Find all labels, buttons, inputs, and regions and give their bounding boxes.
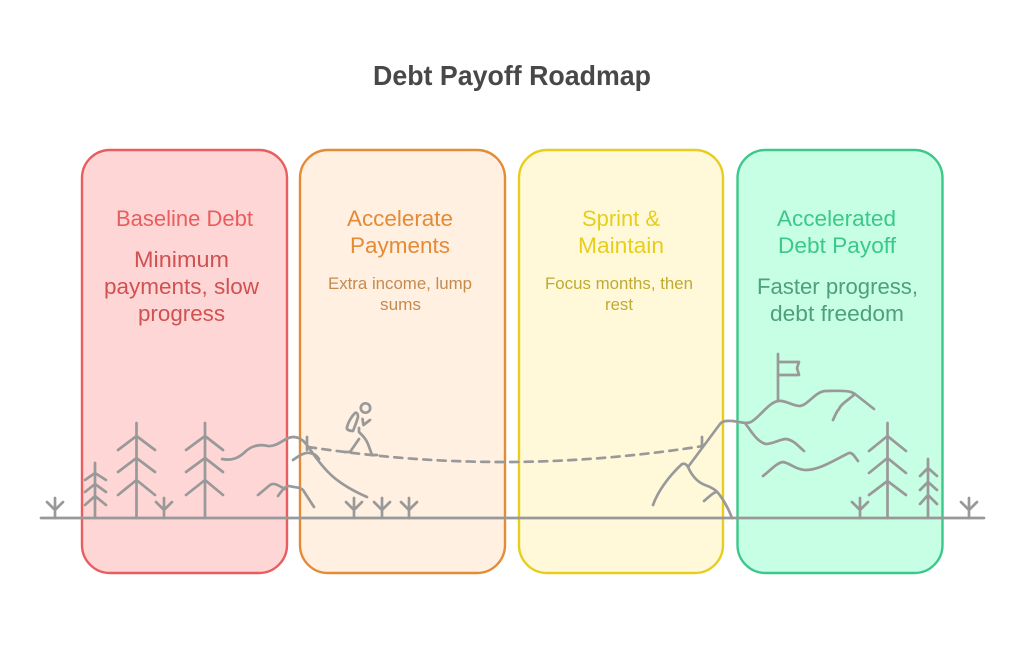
text: payoff description: Faster progress, — [757, 274, 918, 299]
panel: accelerated debt payoff — [738, 150, 942, 573]
text: payoff description: debt freedom — [770, 301, 904, 326]
text: accelerate description — [328, 275, 472, 314]
icon: sprout on peak — [701, 437, 703, 447]
text: baseline description: payments, slow — [104, 274, 260, 299]
icon: sprout on hill — [306, 437, 308, 450]
icon: large tree right — [869, 423, 906, 518]
icon: large tree one — [118, 423, 155, 518]
text: accelerate description: Extra income, lump — [328, 275, 472, 293]
icon: summit flag — [778, 354, 799, 401]
icon: mountain ridge lines — [688, 423, 858, 518]
icon: small tree left — [85, 463, 106, 518]
title: Debt Payoff Roadmap — [373, 60, 651, 91]
text: sprint description: rest — [605, 296, 633, 314]
icon: large tree two — [186, 423, 223, 518]
text: accelerate description: sums — [380, 296, 421, 314]
heading: accelerate payments: Accelerate — [347, 206, 453, 231]
text: sprint description — [545, 275, 693, 314]
heading: accelerate payments: Payments — [350, 233, 450, 258]
icons: grass sprouts — [47, 498, 977, 518]
heading: accelerated debt payoff: Debt Payoff — [778, 233, 897, 258]
panel: sprint and maintain — [519, 150, 723, 573]
dashed trail — [308, 446, 703, 462]
heading: accelerate payments — [347, 206, 453, 258]
heading: accelerated debt payoff — [777, 206, 897, 258]
text: baseline description: Minimum — [134, 247, 229, 272]
ground line — [41, 517, 984, 519]
heading: sprint and maintain: Sprint & — [582, 206, 660, 231]
icon: small tree right — [920, 459, 937, 518]
heading: baseline debt: Baseline Debt — [116, 206, 253, 231]
heading: accelerated debt payoff: Accelerated — [777, 206, 896, 231]
text: baseline description — [104, 247, 260, 326]
icon: left hills — [222, 437, 367, 507]
icon: mountain range — [653, 391, 874, 505]
heading: sprint and maintain — [578, 206, 664, 258]
text: baseline description: progress — [138, 301, 225, 326]
icon: hiker — [345, 403, 377, 455]
text: payoff description — [757, 274, 918, 326]
panel: accelerate payments — [300, 150, 505, 573]
heading: sprint and maintain: Maintain — [578, 233, 664, 258]
text: sprint description: Focus months, then — [545, 275, 693, 293]
panel: baseline debt — [82, 150, 287, 573]
